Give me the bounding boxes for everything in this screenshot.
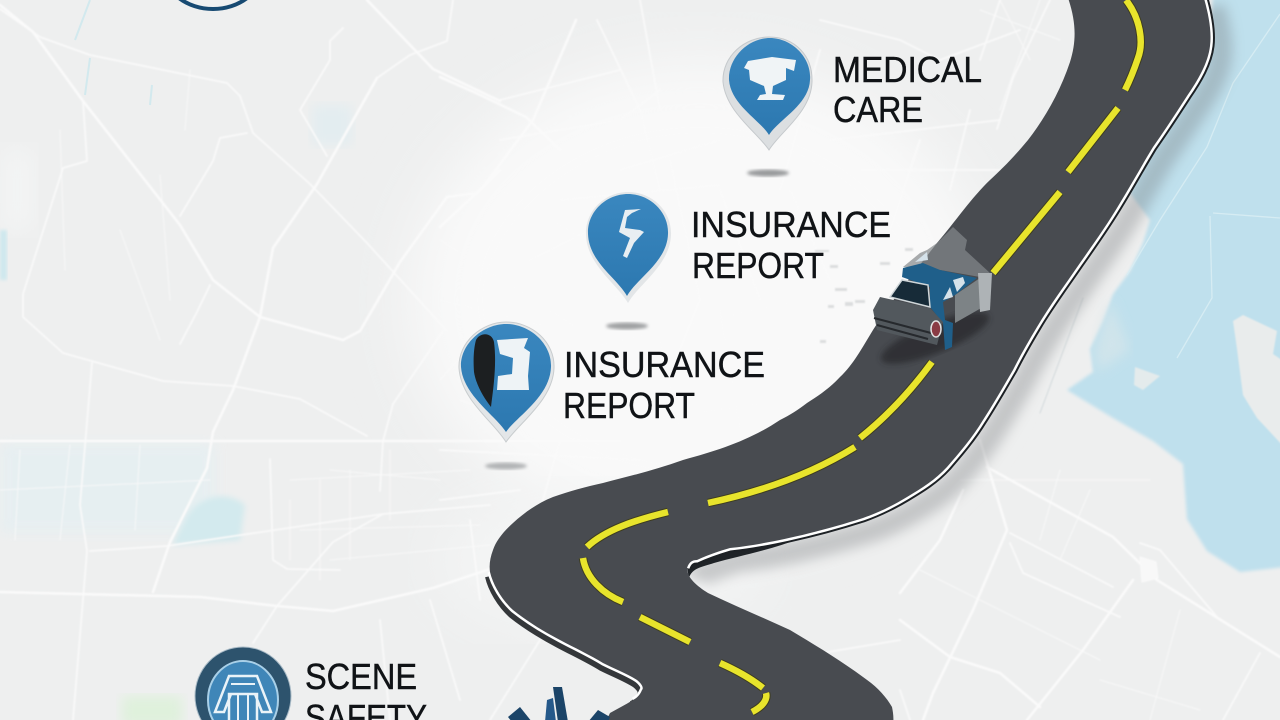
pin body <box>729 38 810 135</box>
road white edge lower left <box>490 572 643 700</box>
lighter central district <box>410 60 990 540</box>
rear window <box>890 280 930 307</box>
water body <box>1067 0 1280 572</box>
car on the road <box>873 227 994 374</box>
shore fade <box>1095 300 1130 372</box>
window reflection <box>915 252 965 300</box>
road surface <box>490 0 1211 720</box>
label: insurance report upper: REPORT <box>692 245 824 286</box>
lighter south-central district <box>440 490 760 630</box>
road notch wall <box>687 538 800 578</box>
label: insurance report upper: INSURANCE <box>691 204 891 245</box>
thin streams <box>75 0 152 105</box>
lighter west patch <box>0 150 35 230</box>
label: medical care <box>833 49 982 130</box>
pin dark shape <box>474 334 495 407</box>
car ghosted hood <box>903 227 990 277</box>
road dark outer edge right <box>687 0 1211 568</box>
car bumper <box>874 318 931 339</box>
bridge lines on water <box>1127 14 1280 358</box>
badge glyph <box>215 676 271 720</box>
badge ring <box>195 647 291 720</box>
pin: insurance report lower <box>459 322 554 470</box>
car roof <box>902 263 977 350</box>
city noise near car <box>815 248 913 343</box>
trunk <box>873 297 943 345</box>
road wall lower left <box>488 576 641 704</box>
icon: partial fan at road bottom <box>508 687 610 720</box>
teal patch north <box>312 105 352 145</box>
label: insurance report upper <box>691 204 891 286</box>
pin rim <box>586 192 671 303</box>
junction <box>1140 557 1158 582</box>
label: scene safety: SCENE <box>305 656 417 697</box>
island large <box>1233 315 1280 448</box>
teal edge sliver <box>0 230 7 280</box>
car shadow <box>876 302 994 374</box>
pin shadow <box>747 170 789 176</box>
badge bars <box>231 684 255 720</box>
road shadow <box>697 7 1221 580</box>
car side panel <box>955 278 983 323</box>
pin rim <box>723 37 812 150</box>
label: medical care: CARE <box>833 89 923 130</box>
pin body <box>588 194 668 296</box>
dash outlines <box>583 0 1141 712</box>
pin shadow <box>606 322 648 330</box>
pin rim <box>459 322 554 442</box>
winding road <box>488 0 1221 720</box>
label: insurance report lower: REPORT <box>563 385 695 426</box>
yellow centre dashes <box>583 0 1141 712</box>
tail light <box>931 321 941 337</box>
island small <box>1134 367 1160 390</box>
pin glyph <box>497 338 530 390</box>
pin glyph <box>744 57 796 100</box>
icon: scene safety badge <box>195 647 291 720</box>
road white edge right <box>687 0 1211 568</box>
teal pond <box>172 496 245 545</box>
car fender <box>978 273 992 312</box>
label: insurance report lower: INSURANCE <box>564 344 765 385</box>
label: insurance report lower <box>563 344 765 426</box>
pin: insurance report upper <box>586 192 671 330</box>
label: medical care: MEDICAL <box>833 49 982 90</box>
pin shadow <box>485 462 527 470</box>
pin glyph <box>619 209 644 258</box>
teal fields band <box>0 443 215 533</box>
water on the right <box>1067 0 1280 572</box>
green patch <box>122 696 182 720</box>
pin: medical care <box>723 37 812 176</box>
label: scene safety <box>305 656 427 720</box>
pin body <box>461 324 551 432</box>
partial logo at top <box>163 0 263 9</box>
badge inner <box>208 661 278 720</box>
